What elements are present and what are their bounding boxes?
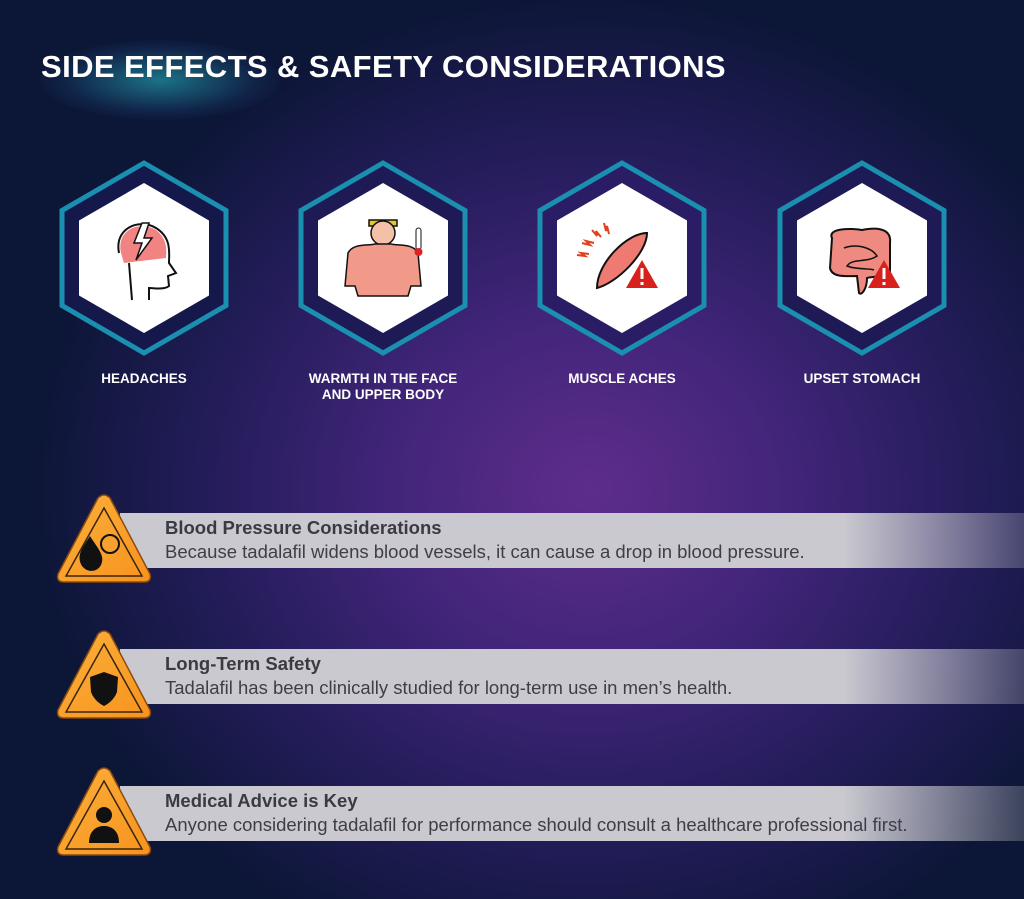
label: warmth: WARMTH IN THE FACE <box>309 371 457 386</box>
icon: blood pressure triangle <box>58 495 150 582</box>
icon: shield triangle <box>58 631 150 718</box>
panel: long-term safety: Tadalafil has been clinically studied for long-term use in men’s health. <box>165 677 732 698</box>
label: upset stomach: UPSET STOMACH <box>804 371 920 386</box>
panel: blood pressure: Because tadalafil widens blood vessels, it can cause a drop in blood pressure. <box>165 541 805 562</box>
icon: muscle hexagon <box>540 163 704 353</box>
label: warmth: AND UPPER BODY <box>322 387 444 402</box>
icon: doctor triangle <box>58 768 150 855</box>
icon: warning triangles <box>56 494 152 856</box>
icon: headaches hexagon <box>62 163 226 353</box>
icon: warmth hexagon <box>301 163 465 353</box>
label: headaches: HEADACHES <box>101 371 187 386</box>
panel: blood pressure <box>120 513 1024 568</box>
panel: medical advice: Medical Advice is Key <box>165 790 358 811</box>
panel: blood pressure: Blood Pressure Considerations <box>165 517 442 538</box>
panel: long-term safety: Long-Term Safety <box>165 653 321 674</box>
panel: medical advice <box>120 786 1024 841</box>
label: muscle aches: MUSCLE ACHES <box>568 371 676 386</box>
panel: long-term safety <box>120 649 1024 704</box>
icon: stomach hexagon <box>780 163 944 353</box>
icons row <box>60 160 946 356</box>
label: warmth <box>308 371 457 402</box>
title: SIDE EFFECTS & SAFETY CONSIDERATIONS <box>41 49 726 84</box>
title glow <box>40 40 280 120</box>
panel: medical advice: Anyone considering tadalafil for performance should consult a healthcare professional first. <box>165 814 907 835</box>
